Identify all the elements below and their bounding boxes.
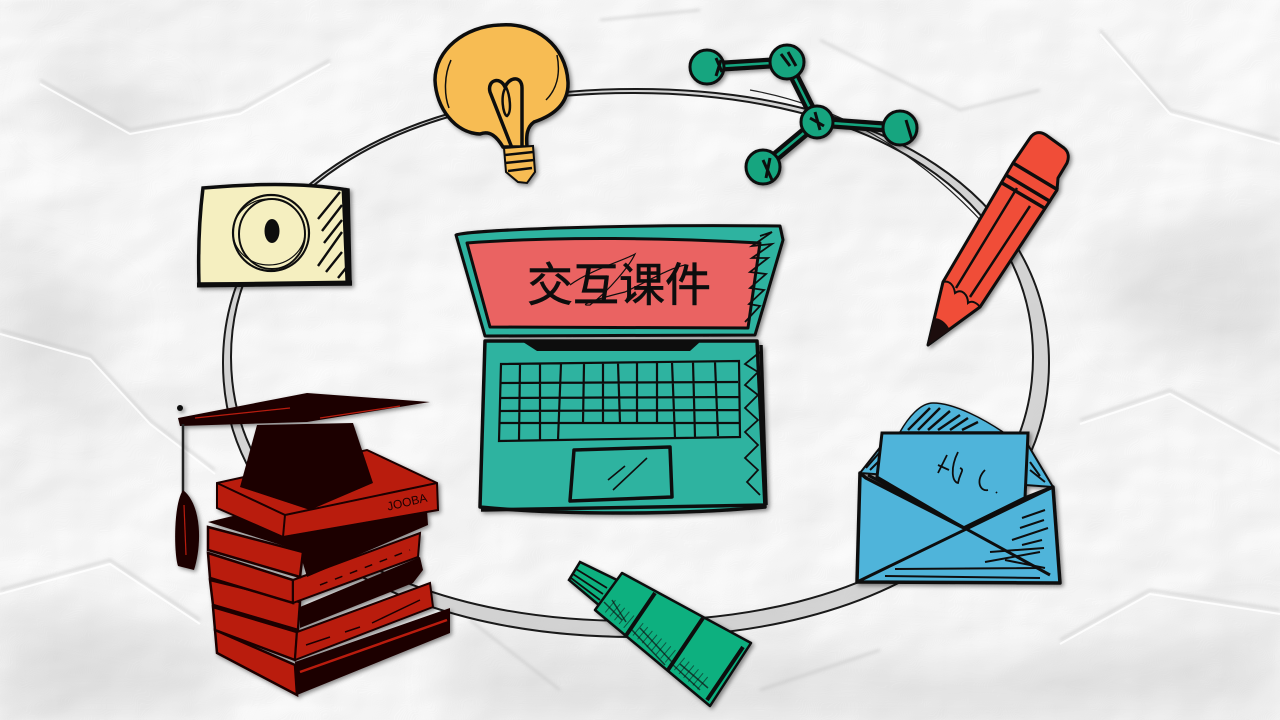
screen title: 交互课件	[527, 259, 711, 311]
icon: pencil	[928, 133, 1068, 345]
top book	[217, 450, 438, 537]
fourth book	[210, 557, 423, 630]
laptop lid	[456, 226, 783, 336]
laptop	[456, 226, 783, 513]
icon: molecule	[690, 45, 917, 184]
laptop base	[480, 341, 766, 513]
stack of books with graduation cap	[175, 393, 450, 695]
icon: envelope with letter	[857, 403, 1060, 583]
keyboard	[499, 361, 740, 441]
top book: JOOBA	[386, 491, 428, 513]
icon: projector	[197, 184, 352, 285]
sketched ring connecting the icons	[223, 89, 1049, 637]
icon: paint tube	[569, 562, 751, 706]
letter sheet	[877, 433, 1028, 528]
bottom book	[215, 608, 450, 695]
graduation cap	[175, 393, 430, 570]
icon: light bulb	[435, 25, 568, 183]
pen flourish over title	[570, 254, 685, 305]
fifth book	[213, 583, 433, 660]
third book	[208, 533, 420, 603]
trackpad	[570, 447, 672, 501]
second book	[208, 510, 428, 577]
